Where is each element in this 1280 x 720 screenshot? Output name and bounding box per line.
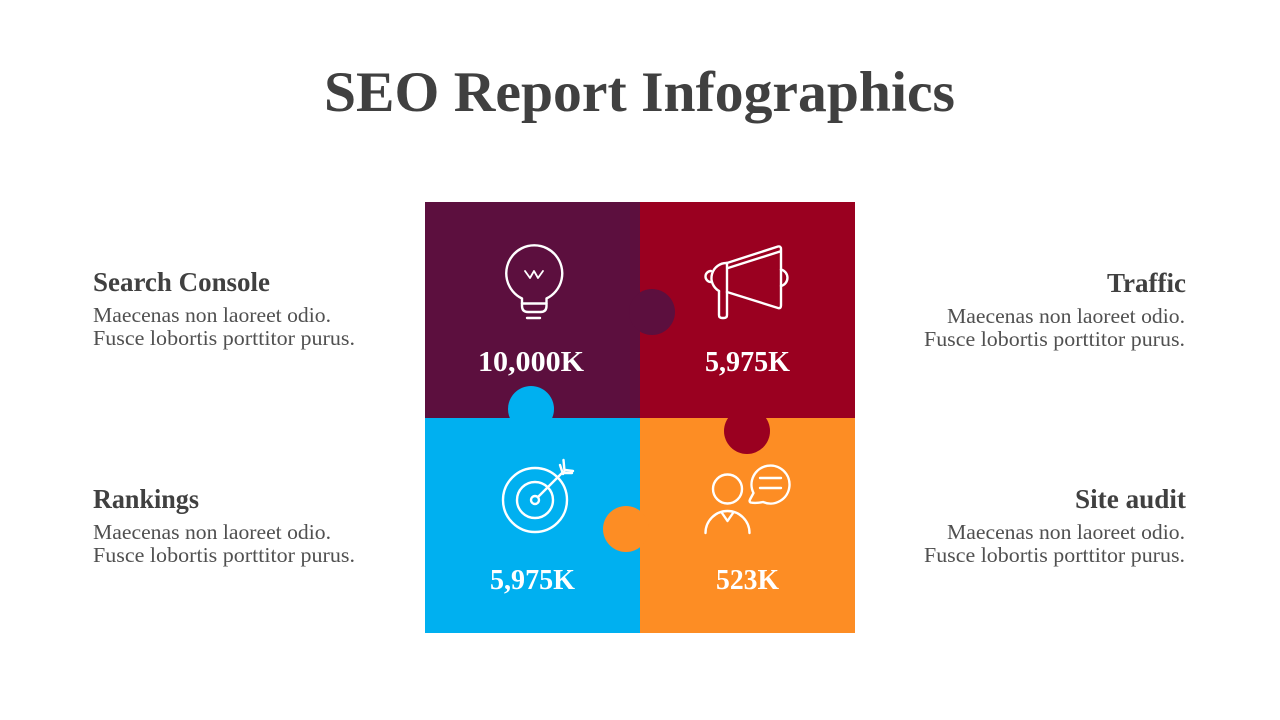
puzzle tab: plum — [629, 289, 675, 335]
puzzle tab: orange — [603, 506, 649, 552]
metric: 5,975K rankings: 5,975K — [490, 564, 575, 596]
puzzle panel: blue rankings piece — [425, 418, 640, 633]
text block: Traffic: Maecenas non laoreet odio. — [947, 304, 1185, 328]
puzzle tab: blue — [508, 386, 554, 432]
text block: Search Console — [93, 267, 355, 350]
icon: target with arrow — [503, 460, 573, 532]
text block: Rankings — [93, 484, 355, 567]
text block: Search Console: Fusce lobortis porttitor purus. — [93, 326, 355, 350]
text block: Rankings: Fusce lobortis porttitor purus. — [93, 543, 355, 567]
puzzle panel: red traffic piece — [640, 202, 855, 418]
icon: megaphone — [706, 246, 787, 318]
metric: 523K: 523K — [716, 564, 779, 596]
title: SEO Report Infographics — [324, 61, 955, 124]
text block: Site audit: Fusce lobortis porttitor purus. — [924, 543, 1185, 567]
text block: Rankings: Maecenas non laoreet odio. — [93, 520, 331, 544]
puzzle panel: orange site audit piece — [640, 418, 855, 633]
puzzle panel: plum search console piece — [425, 202, 640, 418]
text block: Traffic: Fusce lobortis porttitor purus. — [924, 327, 1185, 351]
text block: Site audit: Maecenas non laoreet odio. — [947, 520, 1185, 544]
text block: Rankings: Rankings — [93, 484, 199, 514]
text block: Search Console: Maecenas non laoreet odio. — [93, 303, 331, 327]
puzzle tab: red — [724, 408, 770, 454]
text block: Search Console: Search Console — [93, 267, 270, 297]
icon: person with speech bubble — [706, 466, 790, 533]
text block: Traffic: Traffic — [1107, 268, 1186, 298]
text block: Traffic — [924, 268, 1186, 351]
metric: 10,000K: 10,000K — [478, 346, 584, 378]
metric: 5,975K traffic: 5,975K — [705, 346, 790, 378]
icon: light bulb — [506, 245, 562, 318]
text block: Site audit: Site audit — [1075, 484, 1186, 514]
text block: Site audit — [924, 484, 1186, 567]
